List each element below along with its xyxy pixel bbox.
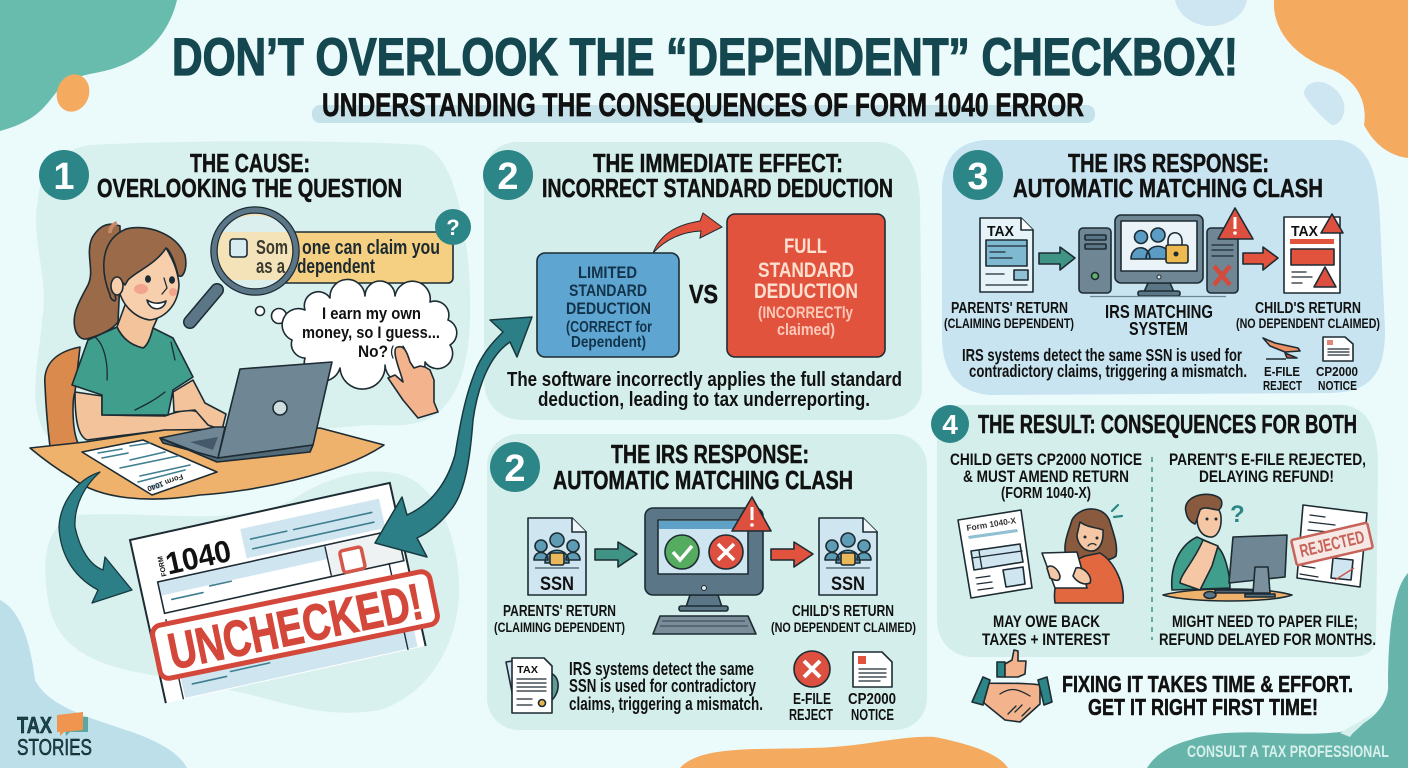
- icon: tax document: [506, 658, 558, 713]
- heading: irs response: THE IRS RESPONSE:: [611, 439, 809, 469]
- icon: parents tax document: [980, 218, 1033, 292]
- panel: irs response left: [487, 434, 927, 730]
- description: The software incorrectly applies the full standard: [507, 368, 902, 391]
- labels: child return: [1236, 300, 1380, 331]
- call to action: GET IT RIGHT FIRST TIME!: [1088, 694, 1318, 720]
- full deduction box: (INCORRECTly: [758, 303, 853, 322]
- full deduction box: claimed): [777, 320, 835, 339]
- description: IRS systems detect the same: [569, 659, 754, 679]
- question bar with checkbox: [250, 232, 453, 283]
- heading: the cause: THE CAUSE:: [190, 148, 310, 178]
- arrow: limited to full: [653, 213, 722, 253]
- number badge 2b: [490, 442, 540, 492]
- icon: cp2000 notice: NOTICE: [851, 707, 894, 724]
- icon: e-file reject: REJECT: [789, 707, 833, 724]
- icon: e-file reject: E-FILE: [793, 691, 831, 708]
- worried woman: [1042, 505, 1123, 603]
- unchecked stamp: [151, 570, 440, 683]
- icon: parents ssn document: SSN: [540, 574, 574, 595]
- question bar with checkbox: dependent: [297, 256, 375, 278]
- number badge 2: 2: [497, 156, 519, 198]
- outcome text: child: TAXES + INTEREST: [982, 630, 1110, 649]
- rejected document: REJECTED: [1298, 527, 1366, 561]
- label: parents return: PARENTS' RETURN: [503, 603, 616, 620]
- panel: form blob background: [45, 471, 459, 713]
- label: child return: (NO DEPENDENT CLAIMED): [771, 619, 916, 635]
- form 1040-x: [958, 510, 1032, 598]
- heading: immediate effect: THE IMMEDIATE EFFECT:: [593, 148, 843, 178]
- limited deduction box: LIMITED: [578, 263, 637, 282]
- child consequence text: & MUST AMEND RETURN: [963, 467, 1129, 486]
- thought bubble: No?: [358, 342, 388, 361]
- label: parents return: (CLAIMING DEPENDENT): [494, 619, 625, 635]
- desk: [30, 428, 384, 499]
- red checkbox: [339, 547, 366, 573]
- heading: the cause: [97, 148, 402, 203]
- form 1040: 1040: [162, 533, 234, 581]
- number badge 1: [39, 150, 89, 200]
- panel: the cause: [30, 141, 471, 499]
- chair: [45, 347, 80, 447]
- description: [569, 659, 763, 714]
- labels: child return: CHILD'S RETURN: [1255, 300, 1361, 317]
- panel: irs response right: [942, 140, 1385, 395]
- heading: immediate effect: INCORRECT STANDARD DEDUCTION: [542, 173, 893, 203]
- icon: child tax document: TAX: [1291, 223, 1318, 240]
- magnifying glass: as a: [256, 256, 286, 278]
- parent consequence text: PARENT'S E-FILE REJECTED,: [1169, 450, 1366, 469]
- icon: cp2000 notice: NOTICE: [1318, 378, 1357, 393]
- description: IRS systems detect the same SSN is used for: [962, 345, 1242, 365]
- icon: e-file reject plane: [1263, 338, 1302, 393]
- child consequence text: CHILD GETS CP2000 NOTICE: [950, 450, 1142, 469]
- outcome text: parent: [1159, 612, 1376, 649]
- logo: tax stories: STORIES: [17, 734, 92, 760]
- panel: immediate effect: [483, 142, 922, 420]
- subtitle: UNDERSTANDING THE CONSEQUENCES OF FORM 1040 ERROR: [322, 87, 1084, 123]
- heading: immediate effect: [542, 148, 893, 203]
- labels: parents return: (CLAIMING DEPENDENT): [944, 315, 1074, 331]
- paper on desk: Form 1040: [146, 472, 184, 493]
- icon: child ssn document: SSN: [831, 574, 865, 595]
- man at computer: [1163, 494, 1292, 601]
- icon: warning triangle: [732, 497, 771, 531]
- labels: irs matching system: IRS MATCHING: [1105, 302, 1213, 322]
- heading: irs response: THE IRS RESPONSE:: [1068, 148, 1269, 178]
- question badge: [435, 209, 471, 245]
- arrow: red: [1243, 247, 1278, 270]
- icon: cp2000 notice: [1316, 337, 1358, 393]
- description: [962, 345, 1247, 381]
- woman: [72, 223, 226, 440]
- heading: the cause: OVERLOOKING THE QUESTION: [97, 173, 402, 203]
- magnifying glass: Som: [256, 237, 288, 259]
- icon: cp2000 notice: CP2000: [848, 691, 896, 708]
- computer with check and cross: [645, 508, 763, 634]
- child consequence text: [950, 450, 1142, 502]
- labels: parents return: PARENTS' RETURN: [951, 300, 1068, 317]
- icon: cp2000 notice: [848, 652, 896, 724]
- thought bubble: money, so I guess...: [302, 323, 440, 342]
- full deduction box: FULL: [784, 235, 827, 258]
- labels: irs matching system: [1105, 302, 1213, 339]
- outcome text: child: MAY OWE BACK: [993, 612, 1101, 631]
- parent consequence text: [1169, 450, 1366, 486]
- number badge 2b: 2: [504, 448, 526, 490]
- full deduction box: DEDUCTION: [754, 280, 858, 303]
- laptop: [160, 362, 332, 462]
- arrow: red: [771, 542, 813, 567]
- man at computer: ?: [1230, 501, 1245, 528]
- vs: VS: [689, 279, 718, 309]
- labels: irs matching system: SYSTEM: [1129, 319, 1188, 339]
- limited deduction box: [537, 253, 679, 357]
- form 1040-x: Form 1040-X: [966, 515, 1017, 533]
- icon: parents ssn document: [528, 518, 586, 595]
- number badge 1: 1: [53, 156, 75, 198]
- label: child return: [771, 603, 916, 635]
- arrow: teal: [595, 542, 637, 567]
- icon: red cross: [709, 535, 743, 569]
- icon: e-file reject: [789, 651, 833, 724]
- icon: e-file reject plane: E-FILE: [1264, 364, 1300, 379]
- full deduction box: STANDARD: [758, 259, 854, 282]
- logo: tax stories: [17, 712, 92, 760]
- magnifying glass: [190, 210, 296, 322]
- icon: parents tax document: TAX: [987, 223, 1014, 240]
- label: parents return: [494, 603, 625, 635]
- limited deduction box: (CORRECT for: [566, 319, 652, 336]
- call to action: [1062, 671, 1353, 720]
- heading: irs response: AUTOMATIC MATCHING CLASH: [1013, 173, 1323, 203]
- thought bubble: [256, 279, 457, 389]
- description: deduction, leading to tax underreporting.: [538, 388, 870, 411]
- limited deduction box: Dependent): [571, 334, 646, 351]
- icon: child tax document: [1284, 214, 1343, 293]
- unchecked stamp: UNCHECKED!: [163, 573, 427, 680]
- icon: warning triangle: [1218, 208, 1253, 239]
- question bar with checkbox: one can claim you: [302, 237, 440, 259]
- heading: irs response: [1013, 148, 1323, 203]
- description: claims, triggering a mismatch.: [569, 694, 763, 714]
- heading: irs response: AUTOMATIC MATCHING CLASH: [553, 465, 853, 495]
- outcome text: child: [982, 612, 1110, 649]
- icon: pointing hand: [388, 347, 438, 418]
- child consequence text: (FORM 1040-X): [1001, 485, 1091, 502]
- number badge 3: 3: [967, 156, 989, 198]
- arrow: teal: [1039, 247, 1075, 270]
- limited deduction box: DEDUCTION: [566, 299, 651, 318]
- description: [507, 368, 902, 411]
- heading: irs response: [553, 439, 853, 495]
- full deduction box: [727, 214, 885, 357]
- icon: tax document: TAX: [517, 664, 538, 676]
- icon: child ssn document: [819, 518, 877, 595]
- description: contradictory claims, triggering a mismatch.: [969, 361, 1247, 381]
- icon: green check: [665, 535, 699, 569]
- icon: e-file reject plane: REJECT: [1263, 378, 1302, 393]
- irs system computers: [1079, 215, 1238, 296]
- logo: tax stories: TAX: [17, 712, 53, 738]
- panel: the result: [931, 405, 1378, 657]
- arrow: desk to form: [59, 472, 132, 603]
- question badge: ?: [446, 215, 460, 240]
- number badge 2: [483, 150, 533, 200]
- icon: thumbs up: [997, 650, 1026, 677]
- thought bubble: I earn my own: [322, 304, 421, 323]
- icon: handshake: [972, 677, 1052, 722]
- arrow: form to panel 2 double-headed: [375, 317, 532, 557]
- limited deduction box: STANDARD: [569, 281, 647, 300]
- rejected document: [1291, 505, 1373, 587]
- description: SSN is used for contradictory: [569, 676, 756, 696]
- number badge 4: [931, 405, 969, 443]
- number badge 4: 4: [942, 409, 958, 440]
- form 1040: [130, 483, 426, 703]
- paper on desk: [82, 440, 217, 495]
- labels: parents return: [944, 300, 1074, 331]
- icon: cp2000 notice: CP2000: [1316, 364, 1358, 379]
- number badge 3: [953, 150, 1003, 200]
- form 1040: FORM: [157, 555, 169, 577]
- label: child return: CHILD'S RETURN: [792, 603, 894, 620]
- parent consequence text: DELAYING REFUND!: [1199, 467, 1334, 486]
